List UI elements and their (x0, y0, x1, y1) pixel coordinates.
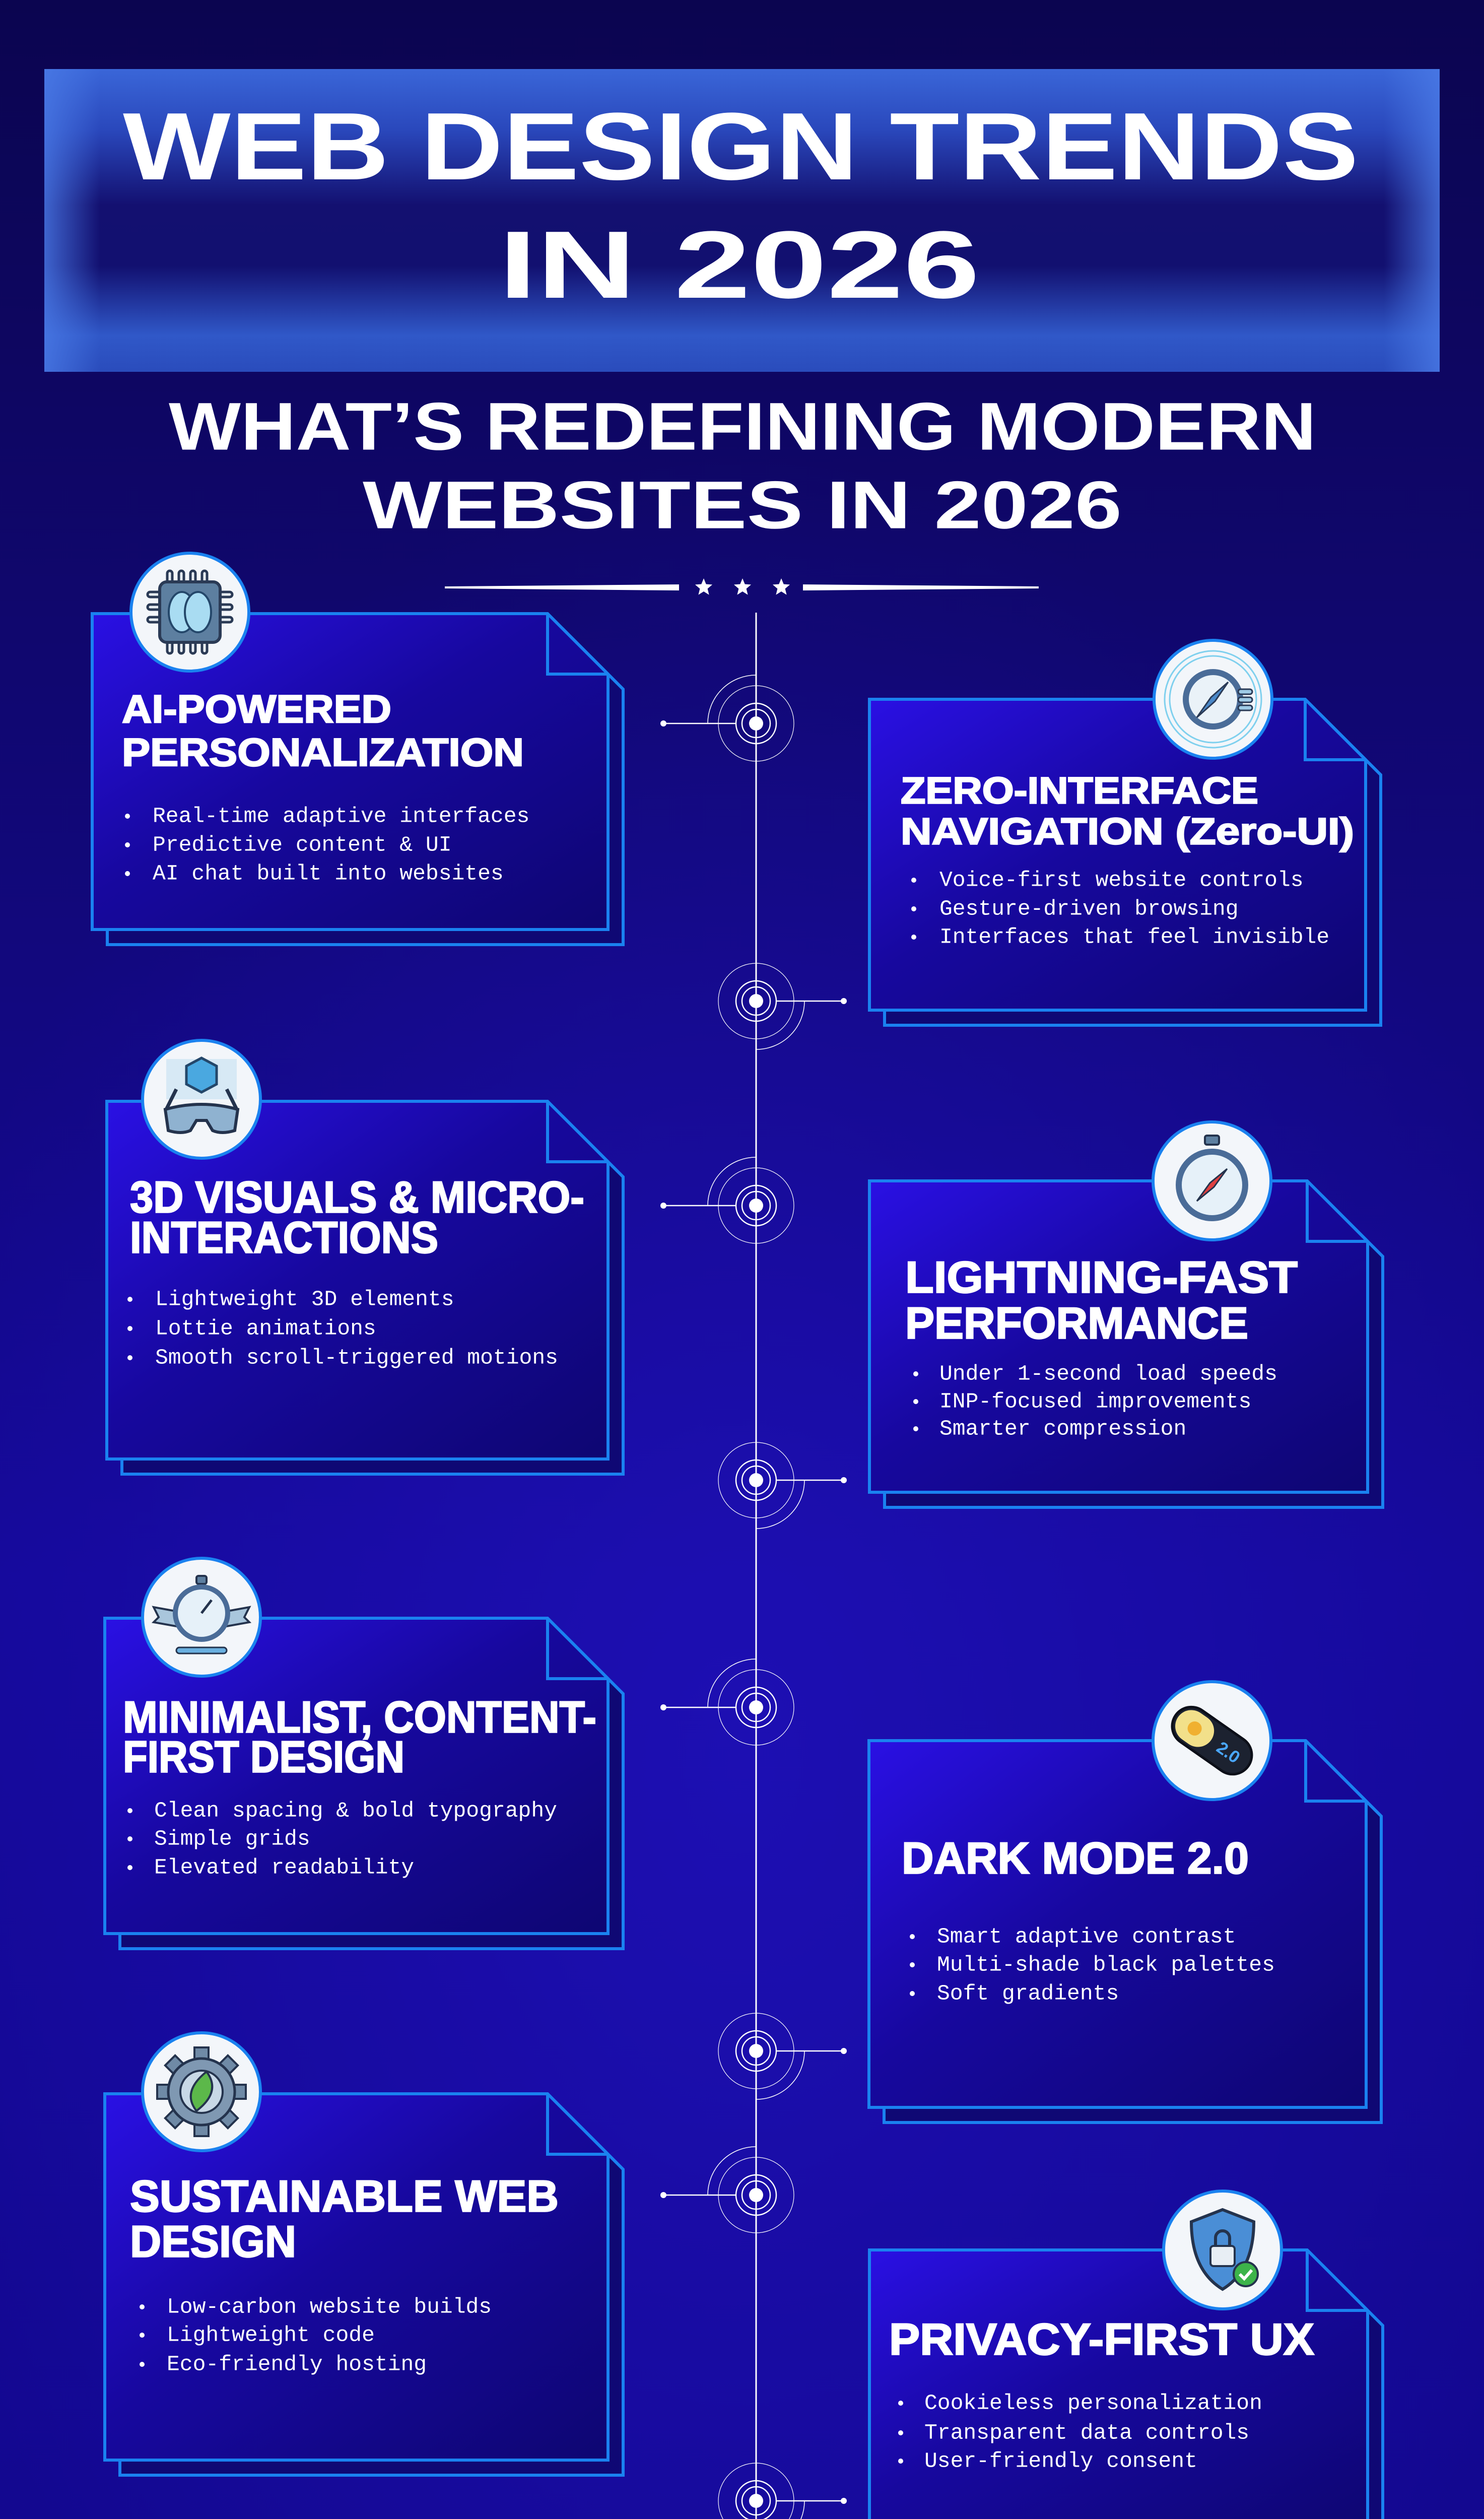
title: INTERACTIONS (130, 1212, 438, 1263)
icon: dark mode toggle: 2.0 (1213, 1738, 1243, 1767)
title: WEB DESIGN TRENDS (123, 93, 1359, 200)
node left 1 (660, 675, 794, 761)
title: SUSTAINABLE WEB (130, 2171, 559, 2221)
node left 5 (660, 1659, 794, 1745)
node left 3 (660, 1157, 794, 1243)
timeline nodes (660, 675, 847, 2519)
subtitle: WHAT’S REDEFINING MODERN (169, 389, 1316, 465)
icon: VR goggles and cube (143, 1040, 260, 1158)
icon: stopwatch (1153, 1122, 1271, 1240)
icon: dark mode toggle (1153, 1682, 1271, 1800)
title: DARK MODE 2.0 (902, 1833, 1249, 1883)
title: PRIVACY-FIRST UX (889, 2314, 1314, 2364)
title (901, 770, 1354, 852)
bullets: INP-focused improvements (939, 1389, 1251, 1414)
title: AI-POWERED (122, 687, 391, 731)
title: FIRST DESIGN (123, 1732, 404, 1781)
panel: AI-powered personalization (92, 553, 623, 945)
title (905, 1252, 1298, 1348)
bullets: Clean spacing & bold typography (154, 1799, 557, 1823)
title: PERFORMANCE (905, 1298, 1248, 1348)
icon: gear with leaf (143, 2033, 260, 2151)
bullets: Voice-first website controls (939, 868, 1304, 893)
title: 3D VISUALS & MICRO- (130, 1172, 584, 1222)
panel: zero-interface navigation (869, 640, 1381, 1025)
bullets: Transparent data controls (924, 2420, 1249, 2445)
bullets: Gesture-driven browsing (939, 897, 1238, 921)
panel: dark mode 2.0 (869, 1682, 1381, 2123)
bullets: Smooth scroll-triggered motions (155, 1345, 558, 1370)
bullets: Cookieless personalization (924, 2391, 1262, 2415)
bullets: Simple grids (154, 1827, 310, 1851)
title: DESIGN (130, 2217, 296, 2266)
bullets: AI chat built into websites (153, 861, 504, 886)
bullets (911, 868, 1329, 949)
title (130, 1172, 584, 1263)
bullets: Soft gradients (937, 1981, 1119, 2006)
bullets: Smarter compression (939, 1417, 1186, 1441)
node right 2 (718, 963, 847, 1049)
title (123, 1692, 596, 1781)
bullets: Interfaces that feel invisible (939, 925, 1329, 949)
bullets: Elevated readability (154, 1855, 414, 1880)
bullets (910, 1925, 1275, 2006)
bullets: Smart adaptive contrast (937, 1925, 1236, 1949)
node right 6 (718, 2013, 847, 2099)
title: IN 2026 (499, 212, 980, 318)
bullets (127, 1799, 557, 1880)
icon: shield lock (1164, 2191, 1281, 2309)
panel: minimalist content-first design (105, 1558, 623, 1949)
bullets (913, 1361, 1277, 1441)
node right 8 (718, 2463, 847, 2519)
bullets (127, 1287, 558, 1370)
panel: lightning-fast performance (869, 1122, 1383, 1507)
node right 4 (718, 1442, 847, 1529)
icon: compass navigation (1154, 640, 1272, 758)
subtitle (169, 389, 1316, 543)
node left 7 (660, 2147, 794, 2233)
bullets: User-friendly consent (924, 2448, 1197, 2474)
title: LIGHTNING-FAST (905, 1252, 1298, 1302)
icon: winged stopwatch (143, 1558, 260, 1676)
icon: AI brain chip (131, 553, 249, 671)
panel: privacy-first UX (869, 2191, 1383, 2519)
bullets: Lightweight code (167, 2323, 375, 2348)
bullets: Predictive content & UI (153, 832, 451, 857)
bullets: Lottie animations (155, 1316, 376, 1341)
title: PERSONALIZATION (122, 730, 524, 774)
panel: sustainable web design (105, 2033, 623, 2475)
title (123, 93, 1359, 318)
bullets (125, 804, 529, 886)
bullets: Under 1-second load speeds (939, 1361, 1277, 1386)
bullets (140, 2294, 492, 2377)
timeline line (756, 613, 757, 2519)
bullets: Lightweight 3D elements (155, 1287, 454, 1312)
bullets: Real-time adaptive interfaces (153, 804, 529, 828)
bullets: Multi-shade black palettes (937, 1953, 1275, 1977)
bullets (898, 2391, 1262, 2474)
panel: 3D visuals & micro-interactions (107, 1040, 623, 1474)
bullets: Eco-friendly hosting (167, 2352, 427, 2377)
title (122, 687, 524, 774)
title: ZERO-INTERFACE (901, 770, 1258, 811)
title: NAVIGATION (Zero-UI) (901, 810, 1354, 852)
subtitle: WEBSITES IN 2026 (363, 468, 1122, 543)
title: MINIMALIST, CONTENT- (123, 1692, 596, 1742)
title (130, 2171, 559, 2266)
bullets: Low-carbon website builds (167, 2294, 492, 2319)
divider with stars (445, 578, 1039, 595)
header banner (44, 69, 1440, 372)
